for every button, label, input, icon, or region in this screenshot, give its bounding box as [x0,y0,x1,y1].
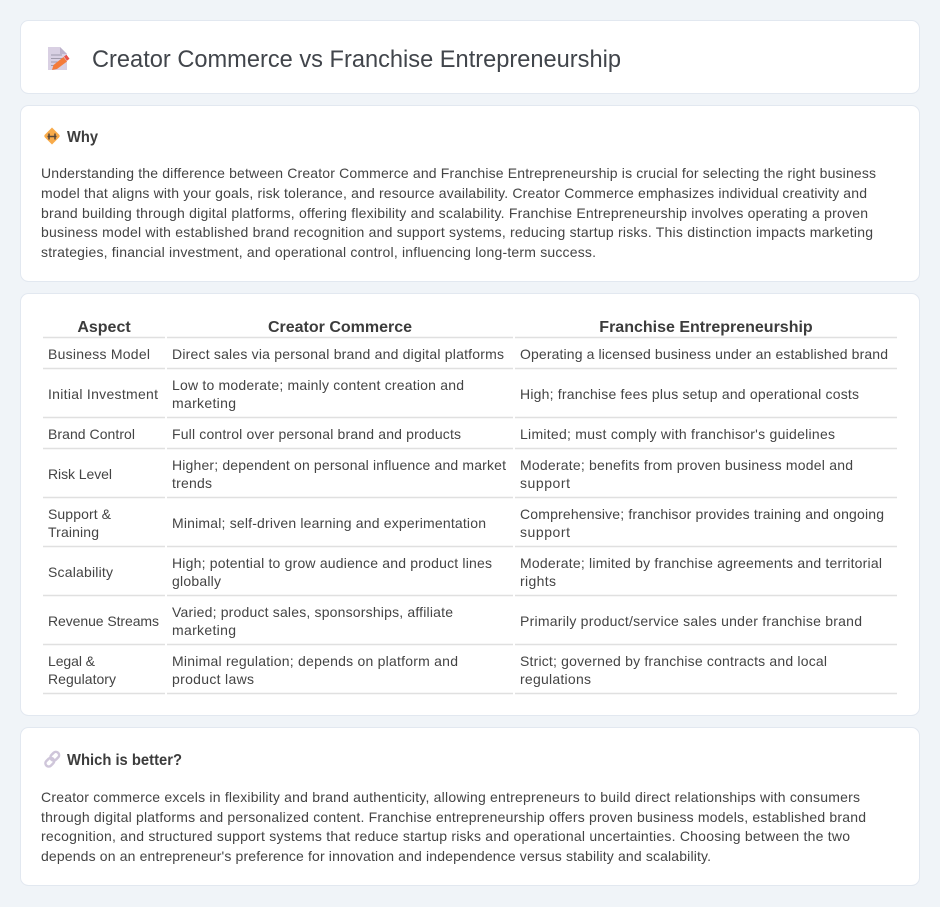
row: business model: Business Model [48,346,150,362]
row: initial investment: Low to moderate; mainly content creation and [172,377,464,393]
row: support and training: support [520,524,570,540]
title: Creator Commerce vs Franchise Entrepreneurship [92,46,621,73]
text block: which is better paragraph: depends on an entrepreneur's preference for innovation and independence versus stability and scalability. [41,848,711,864]
icon: road sign [44,128,60,144]
text block: which is better paragraph: Creator commerce excels in flexibility and brand authenticity, allowing entrepreneurs to build direct relationships with consumers [41,789,860,805]
text block: which is better paragraph: recognition, and structured support systems that reduce startup risks and operational uncertainties. Choosing between the two [41,828,850,844]
icon: document with pencil [48,47,70,70]
row: initial investment [43,377,897,418]
row: risk level: Higher; dependent on personal influence and market [172,457,506,473]
table header: Aspect [77,319,131,336]
row: revenue streams: marketing [172,622,236,638]
text block: why paragraph [41,165,876,260]
panel: why [20,106,920,282]
row: revenue streams: Primarily product/service sales under franchise brand [520,613,862,629]
panel: which is better [20,728,920,886]
row: brand control: Limited; must comply with franchisor's guidelines [520,426,835,442]
row: business model: Operating a licensed business under an established brand [520,346,888,362]
row: support and training: Support & [48,506,112,522]
row: legal and regulatory: product laws [172,671,254,687]
row: initial investment: marketing [172,395,236,411]
row: scalability: High; potential to grow audience and product lines [172,555,492,571]
table header: Franchise Entrepreneurship [599,319,813,336]
row: legal and regulatory: Legal & [48,653,96,669]
row: scalability: Moderate; limited by franchise agreements and territorial [520,555,882,571]
row: scalability: rights [520,573,556,589]
row: brand control [43,426,897,448]
row: risk level: Moderate; benefits from proven business model and [520,457,853,473]
text block: why paragraph: brand building through digital platforms, offering flexibility and scalability. Franchise Entrepreneurship involves operating a proven [41,205,868,221]
text block: which is better paragraph [41,789,866,864]
text block: why paragraph: business model with established brand recognition and support systems, reducing startup risks. This distinction impacts marketing [41,224,873,240]
row: risk level: trends [172,475,212,491]
row: legal and regulatory: Strict; governed by franchise contracts and local [520,653,827,669]
row: legal and regulatory: Regulatory [48,671,116,687]
text block: which is better paragraph: through digital platforms and personalized content. Franchise entrepreneurship offers proven business models, established brand [41,809,866,825]
heading: which is better: Which is better? [67,752,182,769]
row: scalability: globally [172,573,221,589]
table header [43,319,897,338]
icon: link [44,751,60,768]
row: risk level [43,457,897,498]
panel: title header [20,20,920,94]
row: business model: Direct sales via personal brand and digital platforms [172,346,504,362]
row: support and training: Minimal; self-driven learning and experimentation [172,515,486,531]
row: support and training [43,506,897,546]
table header: Creator Commerce [268,319,412,336]
heading: why: Why [67,129,98,146]
text block: why paragraph: strategies, financial investment, and operational control, influencing long-term success. [41,244,596,260]
row: legal and regulatory: Minimal regulation; depends on platform and [172,653,458,669]
text block: why paragraph: Understanding the difference between Creator Commerce and Franchise Entrepreneurship is crucial for selecting the right business [41,165,876,181]
row: support and training: Training [48,524,99,540]
row: initial investment: Initial Investment [48,386,158,402]
row: scalability: Scalability [48,564,113,580]
row: risk level: support [520,475,570,491]
row: risk level: Risk Level [48,466,112,482]
row: revenue streams [43,604,897,644]
row: support and training: Comprehensive; franchisor provides training and ongoing [520,506,884,522]
panel: comparison table [20,294,920,716]
row: legal and regulatory [43,653,897,694]
text block: why paragraph: model that aligns with your goals, risk tolerance, and resource availability. Creator Commerce emphasizes individual creativity and [41,185,867,201]
row: business model [43,346,897,368]
row: revenue streams: Varied; product sales, sponsorships, affiliate [172,604,453,620]
row: brand control: Full control over personal brand and products [172,426,461,442]
row: revenue streams: Revenue Streams [48,613,159,629]
row: brand control: Brand Control [48,426,135,442]
row: initial investment: High; franchise fees plus setup and operational costs [520,386,859,402]
row: scalability [43,555,897,596]
row: legal and regulatory: regulations [520,671,591,687]
